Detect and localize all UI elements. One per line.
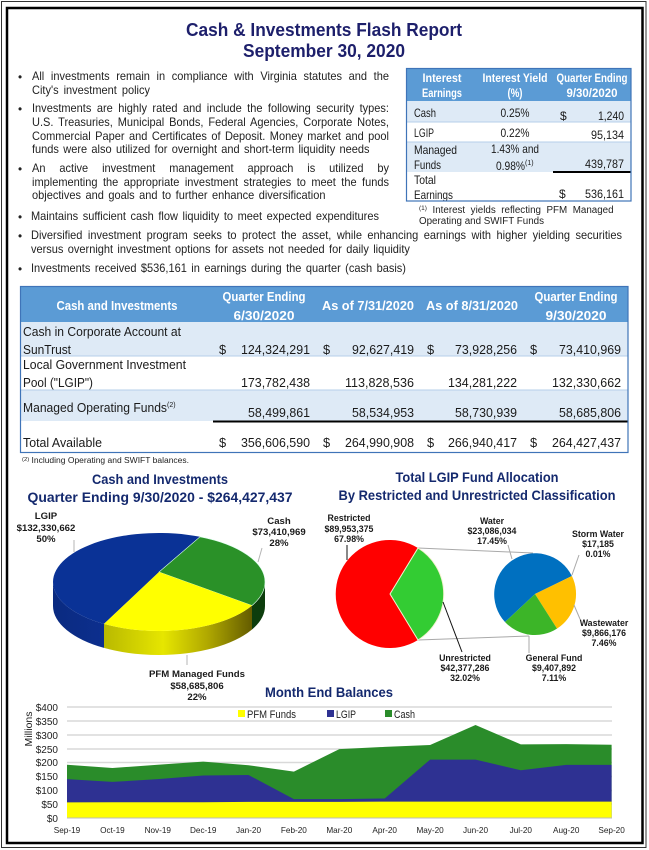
x axis labels: Jun-20 xyxy=(463,826,488,835)
label: general fund: 7.11% xyxy=(542,673,566,683)
label: wastewater: 7.46% xyxy=(592,638,617,648)
label: restricted: Restricted xyxy=(327,513,371,523)
x axis labels: Oct-19 xyxy=(100,826,125,835)
label: water: 17.45% xyxy=(477,536,507,546)
area: LGIP xyxy=(67,760,612,818)
legend: Cash xyxy=(394,709,415,721)
row: managed operating funds: 58,685,806 xyxy=(559,405,621,420)
label: cash: Cash xyxy=(267,516,291,527)
row: total available: $ xyxy=(219,435,226,450)
table: interest earnings: Total xyxy=(414,173,436,187)
row: cash in corporate account: SunTrust xyxy=(23,342,71,357)
text block: bullet points: All investments remain in compliance with Virginia statutes and the xyxy=(32,70,389,83)
interest footnote xyxy=(419,205,614,227)
row: managed operating funds: Managed Operating Funds xyxy=(23,400,167,415)
row: total available xyxy=(23,435,621,450)
row: LGIP xyxy=(23,357,621,390)
table: interest earnings: (%) xyxy=(508,86,522,100)
x axis labels: Sep-19 xyxy=(54,826,81,835)
row: cash in corporate account: $ xyxy=(530,342,537,357)
table: interest earnings: Managed xyxy=(414,143,457,157)
row: total available: 264,427,437 xyxy=(552,435,621,450)
row: cash in corporate account: 73,410,969 xyxy=(559,342,621,357)
chart: 3D pie cash and investments xyxy=(17,511,306,703)
label: cash: 28% xyxy=(269,538,289,549)
heading: cash and investments pie: Quarter Ending 9/30/2020 - $264,427,437 xyxy=(28,489,293,505)
title: September 30, 2020 xyxy=(243,41,405,61)
y axis title: Millions xyxy=(23,711,35,747)
text block: bullet points: objectives and goals and to further enhance diversification xyxy=(32,189,325,202)
row: cash in corporate account: 124,324,291 xyxy=(241,342,310,357)
label: LGIP: 50% xyxy=(36,534,56,545)
x axis labels: Sep-20 xyxy=(598,826,625,835)
row: cash in corporate account: $ xyxy=(219,342,226,357)
title: Cash & Investments Flash Report xyxy=(186,20,462,40)
x axis labels: Jan-20 xyxy=(236,826,261,835)
heading: LGIP allocation: Total LGIP Fund Allocation xyxy=(396,469,558,485)
table footnote: (2) xyxy=(22,457,29,463)
text block: bullet points: Maintains sufficient cash flow liquidity to meet expected expenditures xyxy=(31,210,379,223)
label: unrestricted: Unrestricted xyxy=(439,653,491,663)
table: interest earnings: 0.22% xyxy=(500,126,530,140)
table: cash and investments: Quarter Ending xyxy=(534,289,618,304)
heading: month end balances: Month End Balances xyxy=(265,684,393,700)
text block: bullet points: • xyxy=(18,103,22,116)
row: managed operating funds: 58,534,953 xyxy=(352,405,414,420)
label: water: Water xyxy=(480,516,504,526)
interest footnote: Interest yields reflecting PFM Managed xyxy=(427,205,614,216)
x axis labels: Dec-19 xyxy=(190,826,217,835)
label: cash: $73,410,969 xyxy=(252,527,306,538)
row: cash in corporate account: 73,928,256 xyxy=(455,342,517,357)
y axis labels: $150 xyxy=(36,772,58,783)
x axis labels xyxy=(54,826,625,835)
table: interest earnings: 0.25% xyxy=(500,106,530,120)
table: interest earnings: Quarter Ending xyxy=(556,71,628,85)
y axis labels: $250 xyxy=(36,745,58,756)
interest footnote: (1) xyxy=(419,205,427,212)
y axis labels: $100 xyxy=(36,786,58,797)
chart: stacked area month end balances xyxy=(23,703,625,835)
table: interest earnings: 95,134 xyxy=(591,128,624,142)
table: cash and investments: As of 8/31/2020 xyxy=(426,298,518,313)
row: cash in corporate account: 92,627,419 xyxy=(352,342,414,357)
table: interest earnings: Earnings xyxy=(422,86,462,100)
heading: cash and investments pie xyxy=(28,471,293,505)
label: unrestricted: $42,377,286 xyxy=(441,663,490,673)
label: LGIP: LGIP xyxy=(35,511,57,522)
table: interest earnings: 439,787 xyxy=(585,157,624,171)
text block: bullet points: versus overnight investment options for assets not needed for daily liquidity xyxy=(31,243,410,256)
label: general fund: General Fund xyxy=(526,653,582,663)
interest footnote: Operating and SWIFT Funds xyxy=(419,216,544,227)
table: interest earnings: Interest Yield xyxy=(482,71,548,85)
row: LGIP: 113,828,536 xyxy=(345,375,414,390)
text block: bullet points: • xyxy=(18,163,22,176)
label: PFM managed funds: 22% xyxy=(187,692,207,703)
row: total available: $ xyxy=(530,435,537,450)
label: restricted: 67.98% xyxy=(334,534,364,544)
area: cash xyxy=(67,725,612,818)
x axis labels: Nov-19 xyxy=(145,826,171,835)
text block: bullet points: Investments are highly rated and include the following security types: xyxy=(32,102,389,115)
row: cash in corporate account: $ xyxy=(323,342,330,357)
table: interest earnings: Earnings xyxy=(414,188,453,202)
heading: LGIP allocation xyxy=(338,469,616,503)
row: total available: 264,990,908 xyxy=(345,435,414,450)
row: total available: $ xyxy=(427,435,434,450)
title xyxy=(186,20,462,61)
legend xyxy=(238,709,415,721)
table: interest earnings: Cash xyxy=(414,106,436,120)
legend: PFM Funds xyxy=(247,709,296,721)
x axis labels: May-20 xyxy=(416,826,444,835)
x axis labels: Mar-20 xyxy=(326,826,353,835)
row: managed operating funds: 58,730,939 xyxy=(455,405,517,420)
row: cash in corporate account xyxy=(23,324,621,357)
table footnote: Including Operating and SWIFT balances. xyxy=(29,456,189,465)
table: interest earnings: (1) xyxy=(525,160,534,167)
y axis labels: $400 xyxy=(36,703,58,714)
row: LGIP: 173,782,438 xyxy=(241,375,310,390)
x axis labels: Aug-20 xyxy=(553,826,580,835)
row: managed operating funds xyxy=(23,400,621,420)
label: wastewater: $9,866,176 xyxy=(582,628,626,638)
text block: bullet points: funds were also utilized for overnight and short-term liquidity needs xyxy=(32,143,370,156)
row: LGIP: Pool ("LGIP") xyxy=(23,375,93,390)
text block: bullet points: City's investment policy xyxy=(32,84,150,97)
text block: bullet points: • xyxy=(18,211,22,224)
label: LGIP: $132,330,662 xyxy=(17,523,75,534)
label: storm water: 0.01% xyxy=(586,549,611,559)
label: water: $23,086,034 xyxy=(468,526,517,536)
text block: bullet points xyxy=(18,70,622,276)
row: managed operating funds: 58,499,861 xyxy=(248,405,310,420)
y axis labels: $50 xyxy=(41,800,58,811)
row: total available: 266,940,417 xyxy=(448,435,517,450)
table: interest earnings: Interest xyxy=(422,71,462,85)
y axis labels: $200 xyxy=(36,758,58,769)
text block: bullet points: Diversified investment program seeks to protect the asset, while enhancing earnings with higher yielding securities xyxy=(31,229,622,242)
x axis labels: Feb-20 xyxy=(281,826,307,835)
x axis labels: Jul-20 xyxy=(510,826,532,835)
text block: bullet points: Investments received $536,161 in earnings during the quarter (cash basis) xyxy=(31,262,406,275)
text block: bullet points: • xyxy=(18,263,22,276)
y axis labels: $0 xyxy=(47,814,58,825)
table: interest earnings: 1,240 xyxy=(598,109,624,123)
label: wastewater: Wastewater xyxy=(580,618,628,628)
table: interest earnings: 9/30/2020 xyxy=(566,86,618,100)
table: interest earnings: 0.98% xyxy=(496,159,525,173)
table: cash and investments: Cash and Investments xyxy=(56,298,178,313)
x axis labels: Apr-20 xyxy=(372,826,397,835)
y axis labels: $300 xyxy=(36,731,58,742)
table: cash and investments: 9/30/2020 xyxy=(546,308,606,323)
y axis labels: $350 xyxy=(36,717,58,728)
label: general fund: $9,407,892 xyxy=(532,663,576,673)
table: interest earnings: Funds xyxy=(414,158,441,172)
label: restricted: $89,953,375 xyxy=(325,524,374,534)
area: PFM funds xyxy=(67,802,612,818)
table: interest earnings: LGIP xyxy=(414,126,434,140)
row: LGIP: Local Government Investment xyxy=(23,357,186,372)
table: interest earnings: 536,161 xyxy=(585,187,624,201)
text block: bullet points: • xyxy=(18,71,22,84)
text block: bullet points: An active investment management approach is utilized by xyxy=(32,162,389,175)
y axis labels xyxy=(36,703,58,825)
heading: cash and investments pie: Cash and Investments xyxy=(92,471,228,487)
row: cash in corporate account: Cash in Corporate Account at xyxy=(23,324,181,339)
legend: LGIP xyxy=(336,709,356,721)
text block: bullet points: • xyxy=(18,230,22,243)
table: interest earnings: 1.43% and xyxy=(491,142,539,156)
table: cash and investments xyxy=(20,286,628,452)
row: total available: 356,606,590 xyxy=(241,435,310,450)
label: PFM managed funds: $58,685,806 xyxy=(170,681,224,692)
heading: LGIP allocation: By Restricted and Unrestricted Classification xyxy=(338,487,616,503)
table: interest earnings: $ xyxy=(560,109,567,123)
text block: bullet points: U.S. Treasuries, Municipal Bonds, Federal Agencies, Corporate Notes, xyxy=(32,116,389,129)
table: cash and investments: Quarter Ending xyxy=(222,289,306,304)
row: cash in corporate account: $ xyxy=(427,342,434,357)
text block: bullet points: implementing the appropriate investment strategies to meet the funds xyxy=(32,176,389,189)
table: cash and investments: 6/30/2020 xyxy=(234,308,294,323)
chart: pie of pie LGIP allocation xyxy=(325,513,629,683)
row: LGIP: 132,330,662 xyxy=(552,375,621,390)
table: interest earnings: $ xyxy=(559,187,566,201)
label: unrestricted: 32.02% xyxy=(450,673,480,683)
row: total available: $ xyxy=(323,435,330,450)
label: storm water: $17,185 xyxy=(582,539,614,549)
label: PFM managed funds: PFM Managed Funds xyxy=(149,669,245,680)
row: total available: Total Available xyxy=(23,435,102,450)
row: managed operating funds: (2) xyxy=(167,402,176,409)
table: interest earnings xyxy=(406,68,631,202)
label: storm water: Storm Water xyxy=(572,529,624,539)
table: cash and investments: As of 7/31/2020 xyxy=(322,298,414,313)
text block: bullet points: Commercial Paper and Certificates of Deposit. Money market and pool xyxy=(32,130,389,143)
row: LGIP: 134,281,222 xyxy=(448,375,517,390)
